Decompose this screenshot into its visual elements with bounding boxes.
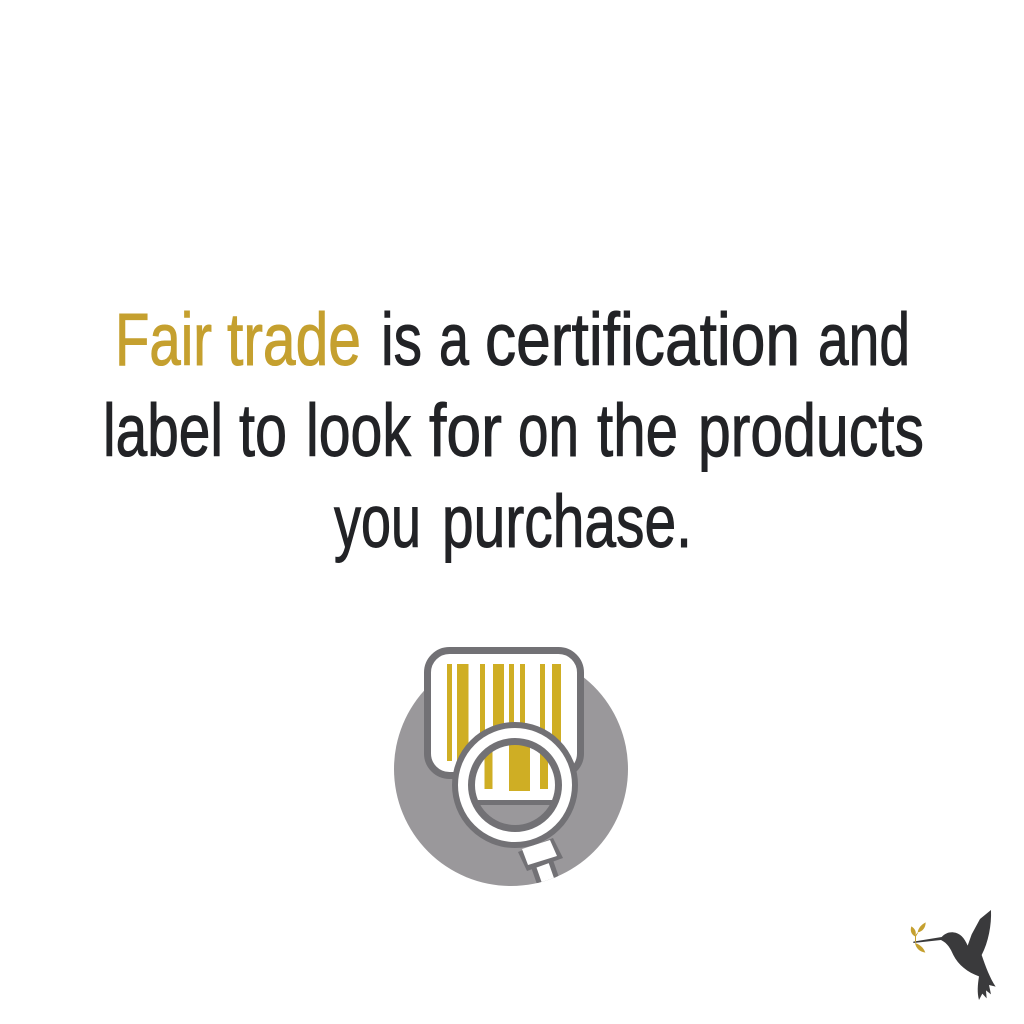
title line 2: products (698, 389, 924, 472)
highlighted phrase: Fair trade: trade (227, 298, 361, 381)
olive sprig (911, 922, 926, 953)
title (103, 298, 924, 563)
title line 1: certification (485, 298, 800, 381)
title line 2: for (429, 389, 502, 472)
icon: hummingbird logo (911, 910, 996, 1000)
title line 1: is (381, 298, 422, 381)
title line 1: and (818, 298, 910, 381)
highlighted phrase: Fair trade: Fair (115, 298, 212, 381)
title line 2 (103, 389, 924, 472)
title line 2: look (306, 389, 412, 472)
title line 2: label (103, 389, 223, 472)
title line 1: a (439, 298, 470, 381)
title line 3: you (334, 480, 421, 563)
title line 2: to (239, 389, 287, 472)
hummingbird silhouette (913, 910, 996, 1000)
title line 3 (334, 480, 692, 563)
title line 3: purchase. (442, 480, 692, 563)
magnifier lens (455, 725, 575, 845)
highlighted phrase: Fair trade (115, 298, 361, 381)
icon background circle (394, 652, 628, 886)
barcode tag (428, 650, 580, 776)
title line 2: on (518, 389, 579, 472)
magnifier handle (518, 838, 563, 884)
icon: barcode under magnifying glass (394, 650, 628, 890)
title line 2: the (597, 389, 678, 472)
